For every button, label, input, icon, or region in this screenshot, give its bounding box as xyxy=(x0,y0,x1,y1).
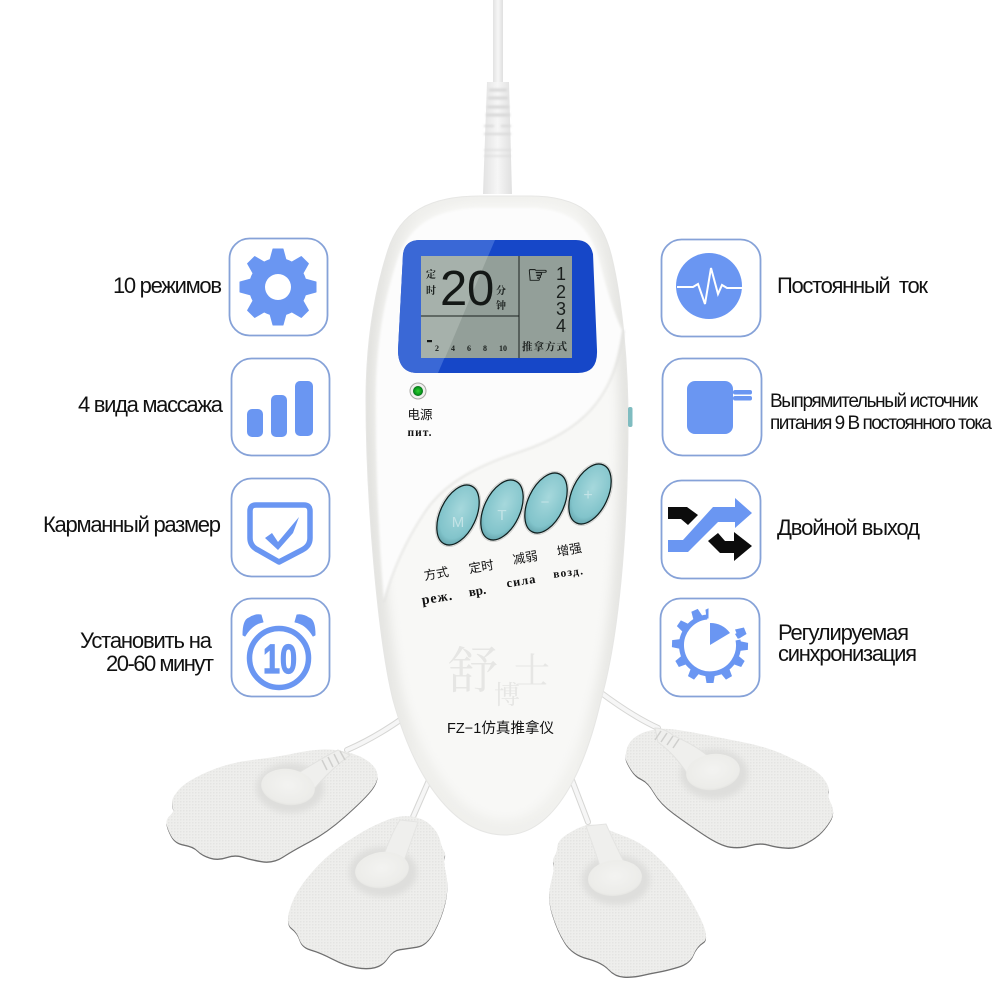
button minus xyxy=(514,464,578,542)
feature: adjustable timing xyxy=(660,598,917,696)
feature: power adapter: питания 9 В постоянного тока xyxy=(770,413,992,434)
button captions: 定时 xyxy=(468,557,495,576)
bezel highlight xyxy=(398,240,495,373)
side switch xyxy=(628,407,632,427)
hand pointer: ☞ xyxy=(527,261,549,289)
mode numbers: 1 xyxy=(556,264,566,284)
scale marker xyxy=(427,340,432,342)
feature: dual output xyxy=(662,480,920,578)
icon: alarm clock: 10 xyxy=(263,636,297,682)
button M: M xyxy=(452,514,464,531)
screen dividers xyxy=(421,256,519,358)
icon: adapter xyxy=(662,358,762,456)
button captions: вр. xyxy=(467,582,487,599)
device body xyxy=(366,196,632,835)
electrode pad: lower right xyxy=(549,824,706,978)
button captions: реж. xyxy=(421,589,454,608)
body soft highlight xyxy=(376,204,618,820)
electrode pad: lower left xyxy=(288,816,447,969)
scale: 10 xyxy=(499,344,507,353)
button minus: − xyxy=(541,494,550,511)
label timer: 定 xyxy=(426,269,436,281)
body upper face xyxy=(376,208,622,600)
scale xyxy=(435,344,507,353)
feature: 4 massage types xyxy=(78,358,330,456)
screen highlight xyxy=(421,256,488,358)
button captions xyxy=(421,540,585,608)
button captions: 减弱 xyxy=(512,549,539,567)
feature: adjustable timing: Регулируемая xyxy=(778,620,909,645)
feature: 10 modes xyxy=(113,238,328,336)
feature: dual output: Двойной выход xyxy=(777,515,920,540)
feature: timer 20-60 xyxy=(80,598,330,696)
power label xyxy=(407,408,433,439)
power label: 电源 xyxy=(407,408,433,422)
body swoosh line xyxy=(384,330,624,602)
feature: power adapter xyxy=(662,358,992,456)
mode label: 推拿方式 xyxy=(522,340,568,353)
scale: 4 xyxy=(451,344,455,353)
feature: power adapter: Выпрямительный источник xyxy=(770,391,979,412)
feature: timer 20-60: Установить на xyxy=(80,628,213,653)
electrode wires xyxy=(347,692,658,822)
cord strain relief xyxy=(483,82,512,194)
LCD panel xyxy=(398,240,597,373)
icon: bars xyxy=(232,358,330,456)
icon: timer gear xyxy=(660,598,760,696)
blue bezel xyxy=(398,240,597,373)
brand watermark: 舒 xyxy=(448,631,498,703)
brand watermark xyxy=(448,631,550,712)
icon: shuffle arrows xyxy=(662,480,760,578)
power LED xyxy=(410,383,426,399)
feature: pocket size: Карманный размер xyxy=(43,512,221,537)
power label: пит. xyxy=(408,427,432,439)
electrode pad: upper left xyxy=(166,749,378,863)
button T xyxy=(470,471,534,549)
mode numbers: 3 xyxy=(556,299,566,319)
button T: T xyxy=(497,507,507,524)
scale: 2 xyxy=(435,344,439,353)
feature: direct current: Постоянный ток xyxy=(777,273,928,298)
feature: direct current xyxy=(662,240,928,336)
screen xyxy=(421,256,572,358)
mode numbers: 4 xyxy=(556,316,566,336)
button plus: + xyxy=(583,487,593,504)
button plus xyxy=(558,455,622,533)
feature: 4 massage types: 4 вида массажа xyxy=(78,392,224,417)
button captions: 增强 xyxy=(556,540,583,559)
feature: adjustable timing: синхронизация xyxy=(778,641,917,666)
buttons xyxy=(426,455,622,554)
button captions: сила xyxy=(505,572,537,590)
feature: pocket size xyxy=(43,478,330,576)
electrode pad: upper right xyxy=(626,728,833,849)
icon: shield check xyxy=(232,478,330,576)
model label: FZ−1仿真推拿仪 xyxy=(447,719,554,737)
icon: gear xyxy=(230,238,328,336)
time digits: 20 xyxy=(440,262,494,316)
label timer xyxy=(426,269,436,297)
power cord xyxy=(483,0,512,194)
icon: alarm clock xyxy=(232,598,330,696)
button captions: возд. xyxy=(553,565,585,581)
label minutes xyxy=(496,284,506,312)
scale: 6 xyxy=(467,344,471,353)
label minutes: 钟 xyxy=(496,299,506,312)
mode numbers xyxy=(556,264,566,336)
icon: pulse xyxy=(662,240,760,336)
button captions: 方式 xyxy=(423,564,450,583)
feature: 10 modes: 10 режимов xyxy=(113,273,222,298)
button M xyxy=(426,476,490,554)
mode numbers: 2 xyxy=(556,282,566,302)
scale: 8 xyxy=(483,344,487,353)
brand watermark: 博 xyxy=(494,675,520,712)
label timer: 时 xyxy=(426,284,436,297)
brand watermark: 士 xyxy=(514,643,550,694)
feature: timer 20-60: 20-60 минут xyxy=(106,651,214,676)
label minutes: 分 xyxy=(496,284,506,297)
